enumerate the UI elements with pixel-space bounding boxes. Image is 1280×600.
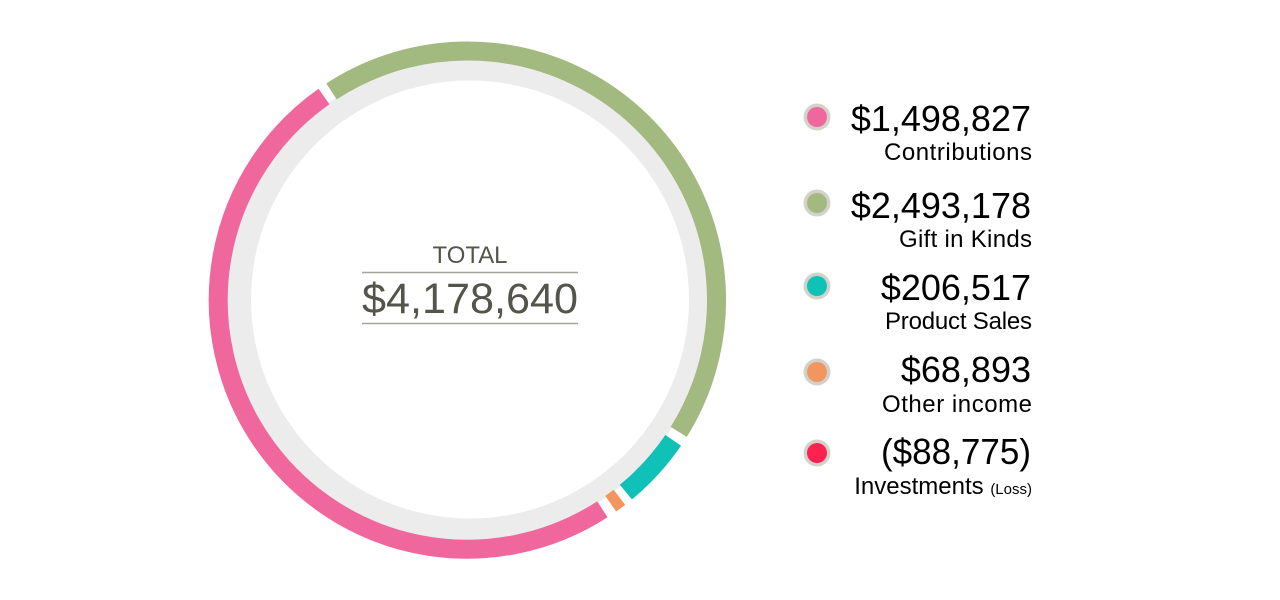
legend item: gift in kinds: Gift in Kinds xyxy=(899,226,1032,253)
total heading: TOTAL xyxy=(432,242,508,269)
total value: $4,178,640 xyxy=(362,275,578,323)
center total xyxy=(362,242,578,324)
legend item: product sales: Product Sales xyxy=(885,308,1032,335)
legend item: product sales: $206,517 xyxy=(881,267,1031,308)
legend item: contributions xyxy=(804,98,1032,166)
legend item: other income xyxy=(804,349,1032,418)
donut chart xyxy=(218,51,717,549)
legend item: contributions: $1,498,827 xyxy=(851,98,1031,139)
legend item: other income: Other income xyxy=(882,391,1032,418)
legend item: investments xyxy=(804,431,1032,500)
grey inner ring xyxy=(226,59,708,541)
segment: product sales xyxy=(626,440,673,492)
segment: contributions xyxy=(218,96,602,549)
legend item: investments: Investments (Loss) xyxy=(854,473,1032,500)
segment: other income xyxy=(611,497,619,504)
legend xyxy=(804,98,1032,500)
legend item: gift in kinds: $2,493,178 xyxy=(851,185,1031,226)
legend item: gift in kinds xyxy=(804,185,1032,253)
legend item: product sales xyxy=(804,267,1032,335)
legend item: investments: ($88,775) xyxy=(881,431,1031,472)
legend item: other income: $68,893 xyxy=(901,349,1031,390)
legend item: contributions: Contributions xyxy=(884,139,1032,166)
segment: gift in kinds xyxy=(332,51,717,432)
